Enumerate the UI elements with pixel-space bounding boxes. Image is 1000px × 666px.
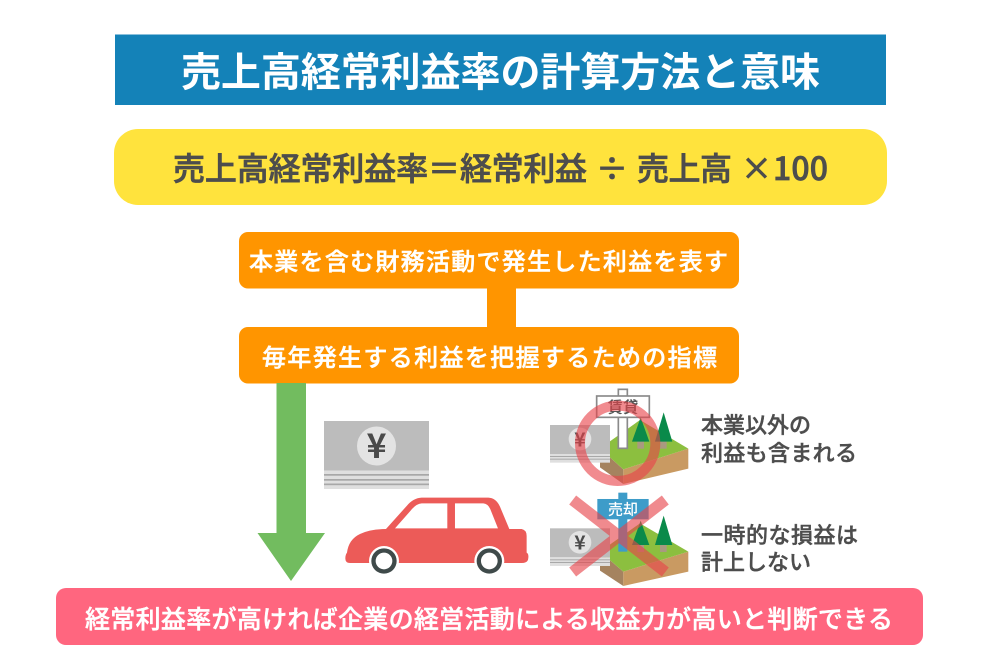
conclusion bar [56,588,923,645]
text: one-time gains excluded [701,518,858,577]
formula panel: 100 [773,144,828,190]
formula panel: 売上高 [637,144,732,190]
connector between orange boxes [487,285,516,330]
icon: red car [345,498,528,576]
formula panel: 売上高経常利益率＝ [173,144,460,190]
arrow: green down arrow [258,383,325,581]
orange box: definition [239,232,739,288]
title [115,34,886,105]
formula panel: × [741,144,772,189]
icon: banknote stack [324,419,429,489]
text: one-time gains excluded: 一時的な損益は [701,518,858,550]
icon: rental land with circle mark: ¥ [574,424,586,452]
text: includes non-core profit: 利益も含まれる [701,436,857,468]
text: includes non-core profit [701,408,857,468]
icon: rental land with circle mark: 賃貸 [608,395,638,417]
icon: land for sale with cross mark [550,493,688,586]
formula panel: 経常利益 [460,144,587,190]
orange box: indicator [239,327,739,384]
text: one-time gains excluded: 計上しない [701,545,811,577]
formula panel: ÷ [596,144,628,190]
icon: rental land with circle mark [550,389,688,484]
orange box: definition: 本業を含む財務活動で発生した利益を表す [249,242,728,277]
text: includes non-core profit: 本業以外の [701,408,811,440]
icon: land for sale with cross mark: ¥ [574,528,586,556]
orange box: indicator: 毎年発生する利益を把握するための指標 [262,338,717,373]
formula panel [114,129,887,205]
icon: land for sale with cross mark: 売却 [608,499,638,520]
conclusion bar: 経常利益率が高ければ企業の経営活動による収益力が高いと判断できる [85,600,893,636]
title: 売上高経常利益率の計算方法と意味 [181,40,820,98]
icon: banknote stack: ¥ [366,419,387,468]
